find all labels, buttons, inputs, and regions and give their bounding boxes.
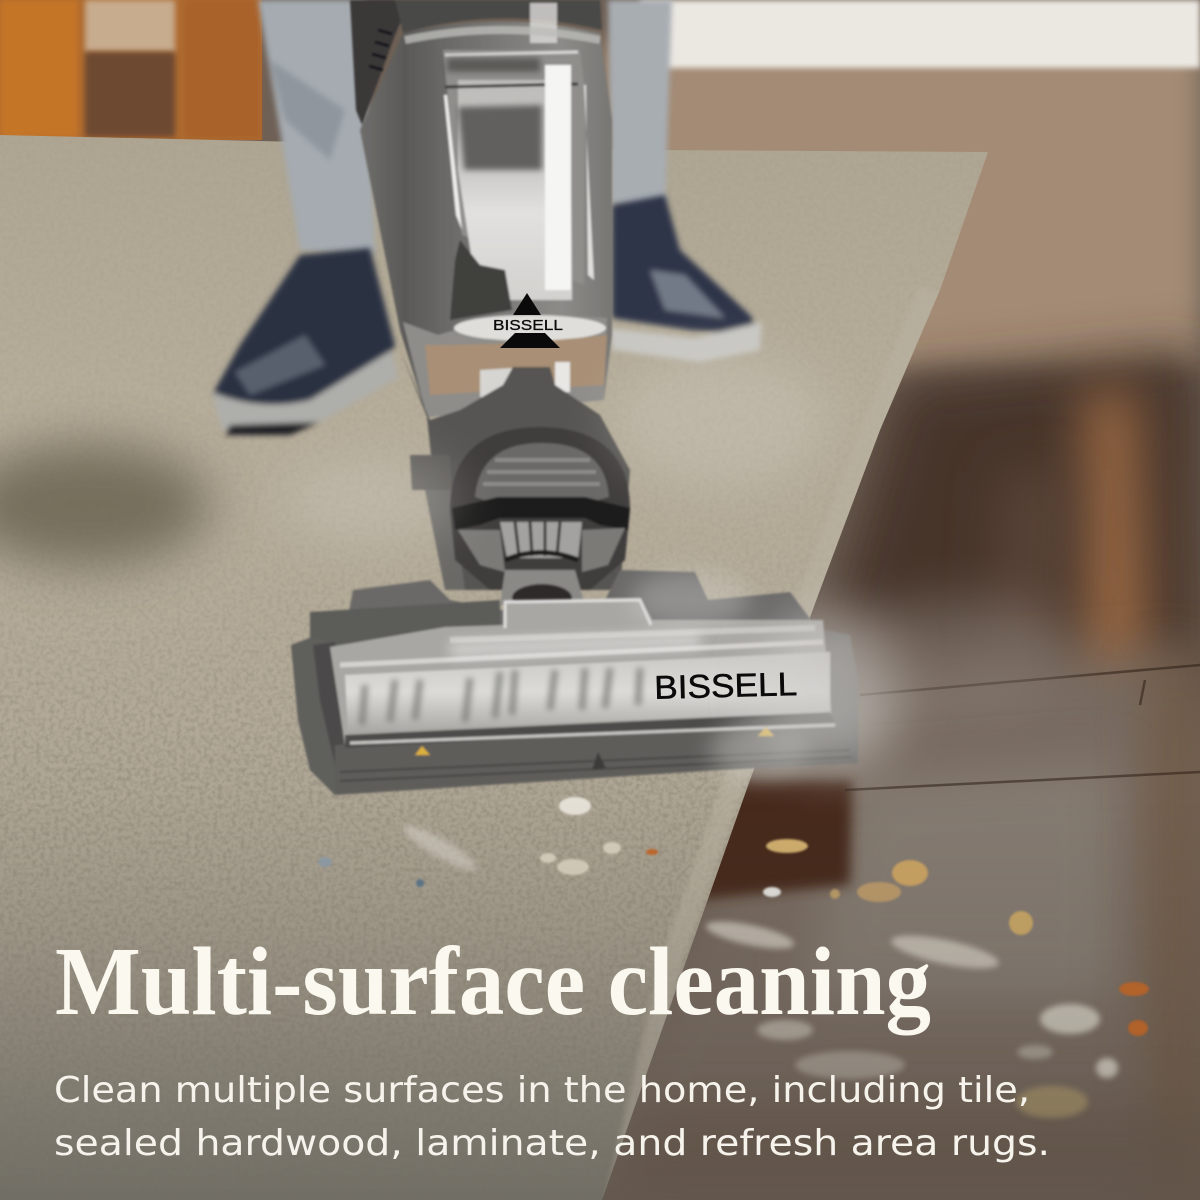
- tank logo: [493, 293, 563, 348]
- transparent cover: [330, 598, 832, 745]
- floorboard lines: [845, 665, 1200, 790]
- lower dirty tank: [403, 316, 607, 417]
- sludge: [450, 240, 512, 320]
- body line two: sealed hardwood, laminate, and refresh area rugs.: [54, 1123, 1050, 1164]
- neck and motor housing: [400, 350, 630, 590]
- handle: [350, 0, 410, 125]
- tank top cap: [395, 0, 602, 33]
- vacuum body: [350, 0, 630, 612]
- side plates: [458, 530, 505, 572]
- tank logo: BISSELL: [493, 317, 563, 334]
- floor sheen: [560, 650, 1200, 1200]
- clean water tank: [360, 22, 612, 417]
- rear wings: [340, 570, 815, 660]
- body line one: Clean multiple surfaces in the home, including tile,: [54, 1070, 1030, 1111]
- brushroll: [345, 652, 830, 732]
- inner cup: [443, 50, 585, 285]
- pivot: [500, 570, 585, 605]
- rug edge binding: [616, 290, 930, 1200]
- title: Multi-surface cleaning: [55, 928, 931, 1036]
- left shoe: [212, 248, 398, 435]
- damp patch on rug: [0, 443, 210, 567]
- darkening gradient behind caption: [0, 800, 1200, 1200]
- shoes: [212, 195, 762, 435]
- upper hardwood tan: [600, 40, 1200, 370]
- legs: [258, 0, 672, 255]
- right end cap: [825, 630, 858, 765]
- black band: [452, 497, 630, 530]
- head logo text: BISSELL: [654, 665, 798, 706]
- filter: [458, 105, 542, 170]
- cleaning head: [291, 570, 858, 795]
- dome: [450, 427, 630, 590]
- right shoe: [610, 195, 762, 362]
- area rug: [0, 135, 988, 1200]
- left end cap: [291, 637, 350, 795]
- fins: [500, 522, 582, 558]
- bumper: [335, 720, 858, 795]
- left wood furniture: [0, 0, 262, 140]
- lower lip: [345, 712, 835, 748]
- caption block: [54, 928, 1050, 1164]
- bright highlight: [545, 65, 571, 290]
- crumbs and debris: [318, 797, 1149, 1118]
- steam: [280, 350, 1080, 780]
- dark hardwood: [800, 350, 1200, 720]
- wall: [640, 0, 1200, 68]
